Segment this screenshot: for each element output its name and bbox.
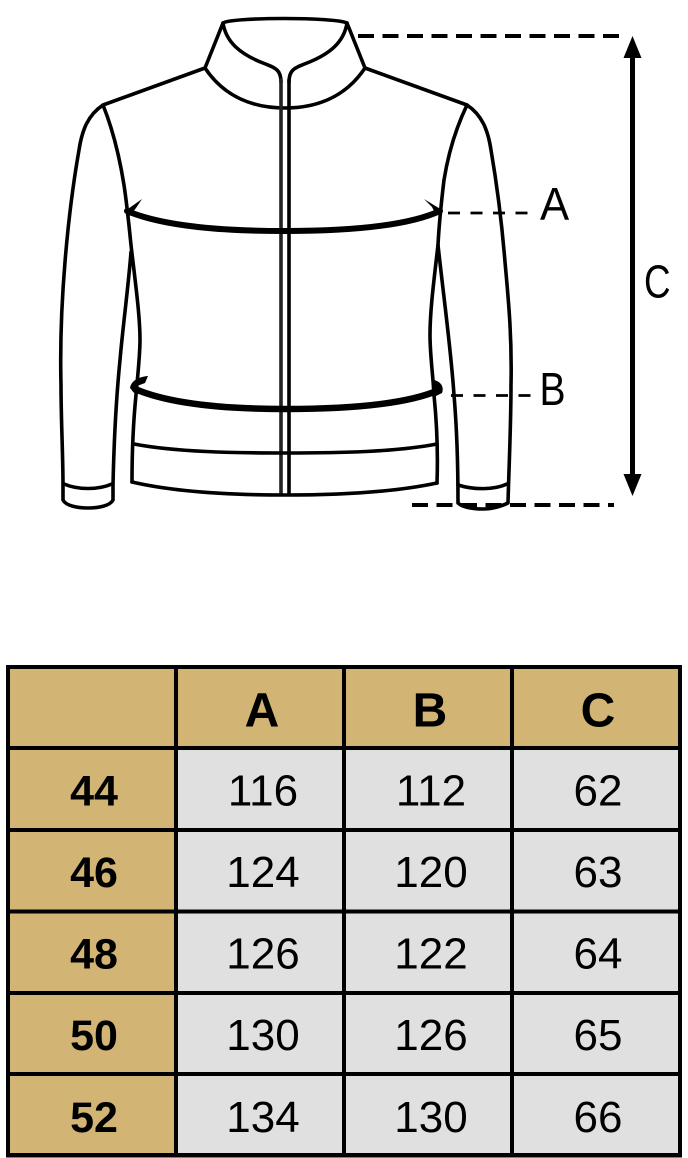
label C: C xyxy=(644,256,671,307)
measurement band A xyxy=(125,199,442,231)
row 48 xyxy=(10,914,678,991)
table grid xyxy=(6,665,682,1158)
measurement band B xyxy=(130,376,443,409)
jacket right sleeve xyxy=(365,68,511,509)
row 50: 126 xyxy=(394,1011,468,1060)
row 48: 48 xyxy=(70,930,118,978)
row 50 xyxy=(10,995,678,1072)
row 44: 112 xyxy=(396,766,466,816)
row 52: 66 xyxy=(574,1093,622,1142)
dashed guide line to jacket top xyxy=(358,34,622,38)
jacket zipper placket xyxy=(281,80,289,494)
jacket cuffs xyxy=(64,484,507,489)
row 48: 64 xyxy=(574,930,622,978)
row 50: 130 xyxy=(226,1011,300,1060)
row 44: 44 xyxy=(70,768,118,816)
row 52 xyxy=(10,1076,678,1153)
jacket collar xyxy=(205,18,365,108)
row 52: 134 xyxy=(226,1093,300,1142)
header row: A xyxy=(245,684,279,738)
row 48: 122 xyxy=(394,930,468,978)
row 46: 120 xyxy=(394,848,468,897)
row 46: 63 xyxy=(574,848,622,897)
row 44: 62 xyxy=(574,766,622,816)
dashed guide line to jacket bottom xyxy=(412,503,614,507)
label A: A xyxy=(540,178,569,230)
row 44: 116 xyxy=(228,766,298,816)
row 50: 50 xyxy=(70,1012,118,1060)
jacket left armhole and side xyxy=(103,105,140,482)
row 44 xyxy=(10,750,678,828)
jacket diagram xyxy=(61,18,511,509)
row 46: 46 xyxy=(70,849,118,897)
row 52: 130 xyxy=(394,1093,468,1142)
jacket left sleeve xyxy=(61,68,205,508)
row 50: 65 xyxy=(574,1011,622,1060)
header row xyxy=(10,669,678,746)
row 46 xyxy=(10,832,678,910)
dashed leader line A xyxy=(448,212,534,214)
header row: B xyxy=(413,684,447,738)
jacket right armhole and side xyxy=(430,105,467,483)
header row: C xyxy=(581,684,615,738)
double-headed height arrow xyxy=(624,36,642,496)
row 52: 52 xyxy=(70,1094,118,1142)
label B: B xyxy=(540,364,566,416)
row 48: 126 xyxy=(226,930,300,978)
row 46: 124 xyxy=(226,848,300,897)
dashed leader line B xyxy=(451,394,536,397)
size table xyxy=(6,665,682,1158)
jacket hem and rib band xyxy=(132,444,437,495)
